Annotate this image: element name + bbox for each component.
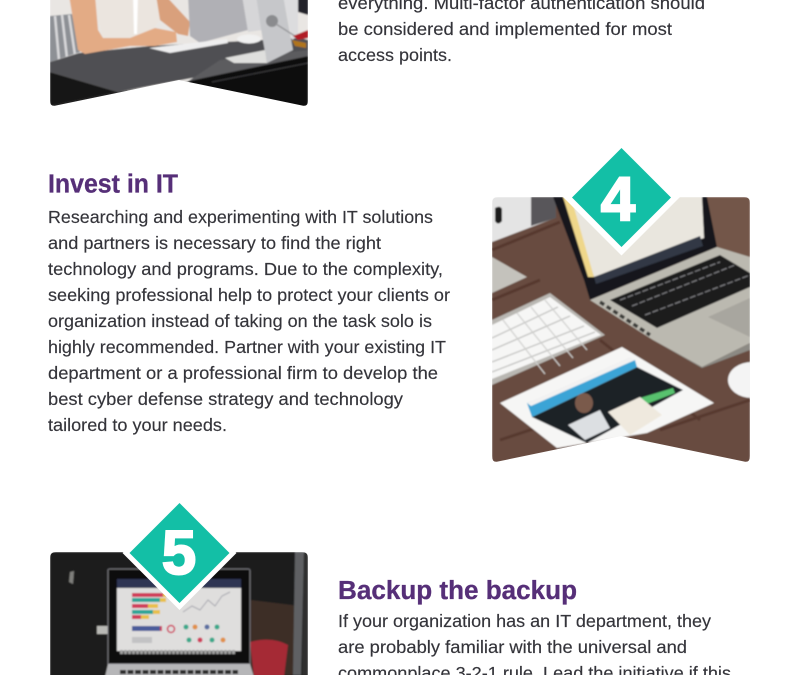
- text: Invest in IT paragraph: best cyber defense strategy and technology: [48, 389, 403, 409]
- badge: number 5 diamond: [122, 496, 236, 610]
- text: Invest in IT paragraph: Researching and experimenting with IT solutions: [48, 207, 433, 227]
- text: Invest in IT paragraph: organization instead of taking on the task solo is: [48, 311, 432, 331]
- photo: laptop showing charts in dark room: [50, 552, 308, 675]
- photo: woman typing at desk: [50, 0, 308, 110]
- text: Invest in IT paragraph: seeking professional help to protect your clients or: [48, 285, 450, 305]
- text: Invest in IT paragraph: and partners is necessary to find the right: [48, 233, 381, 253]
- text: Invest in IT paragraph: [48, 207, 450, 435]
- photo: laptop, keyboard and tablet on wooden desk: [492, 197, 776, 463]
- text: Invest in IT paragraph: highly recommended. Partner with your existing IT: [48, 337, 446, 357]
- badge: number 5 diamond: 5: [162, 519, 196, 588]
- text: Backup the backup paragraph: are probably familiar with the universal and: [338, 637, 687, 657]
- text: access points paragraph: access points.: [338, 45, 452, 65]
- text: access points paragraph: [338, 0, 705, 65]
- text: Invest in IT paragraph: tailored to your needs.: [48, 415, 227, 435]
- text: access points paragraph: be considered and implemented for most: [338, 19, 672, 39]
- text: Invest in IT paragraph: department or a professional firm to develop the: [48, 363, 438, 383]
- badge: number 4 diamond: 4: [601, 165, 636, 234]
- text: Backup the backup paragraph: [338, 611, 731, 675]
- text: Backup the backup paragraph: If your organization has an IT department, they: [338, 611, 711, 631]
- heading: Invest in IT: Invest in IT: [48, 170, 178, 198]
- heading: Backup the backup: Backup the backup: [338, 577, 577, 605]
- text: Invest in IT paragraph: technology and programs. Due to the complexity,: [48, 259, 443, 279]
- badge: number 4 diamond: [563, 138, 680, 256]
